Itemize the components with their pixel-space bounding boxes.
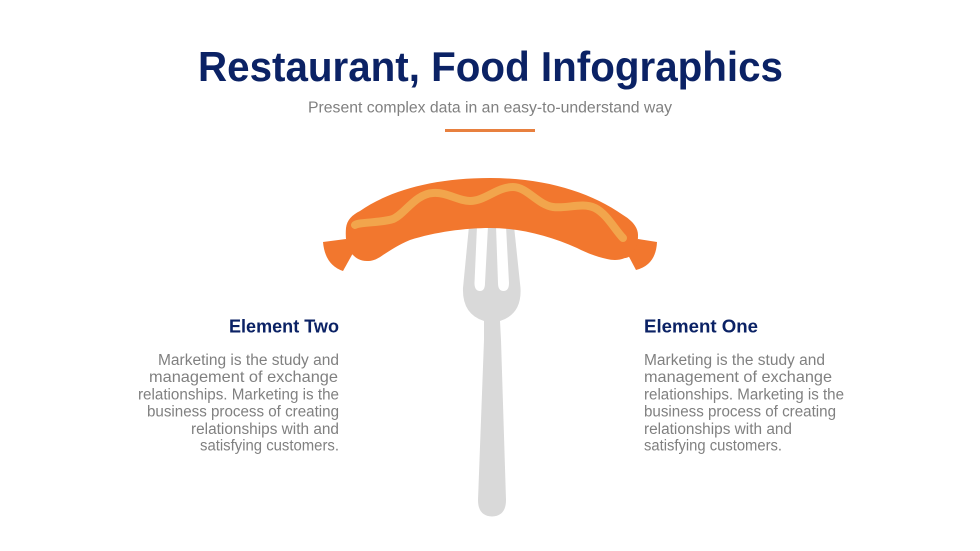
text block: element two — [138, 316, 339, 454]
text block: element one — [644, 316, 844, 454]
body: element two: business process of creating — [147, 404, 339, 420]
body: element one: relationships with and — [644, 421, 792, 438]
subtitle: Present complex data in an easy-to-understand way — [308, 100, 672, 116]
body: element two: satisfying customers. — [200, 438, 339, 454]
body: element one — [644, 352, 844, 454]
body: element one: Marketing is the study and — [644, 352, 825, 369]
body: element two: Marketing is the study and — [158, 352, 339, 369]
sausage body — [346, 178, 638, 261]
icon: sausage on fork — [323, 178, 657, 271]
body: element one: business process of creating — [644, 404, 836, 420]
sausage right end — [627, 239, 657, 270]
icon: fork — [463, 226, 521, 516]
body: element one: management of exchange — [644, 369, 832, 386]
title: Restaurant, Food Infographics — [198, 43, 783, 90]
body: element two: relationships with and — [191, 421, 339, 438]
body: element two: relationships. Marketing is the — [138, 386, 339, 404]
body: element one: satisfying customers. — [644, 438, 782, 454]
sausage left end — [323, 239, 353, 271]
body: element one: relationships. Marketing is the — [644, 386, 844, 404]
heading: element two: Element Two — [229, 316, 339, 336]
heading: element one: Element One — [644, 316, 758, 336]
body: element two: management of exchange — [149, 369, 338, 386]
mustard line — [355, 187, 623, 238]
body: element two — [138, 352, 339, 454]
title divider — [445, 129, 535, 132]
